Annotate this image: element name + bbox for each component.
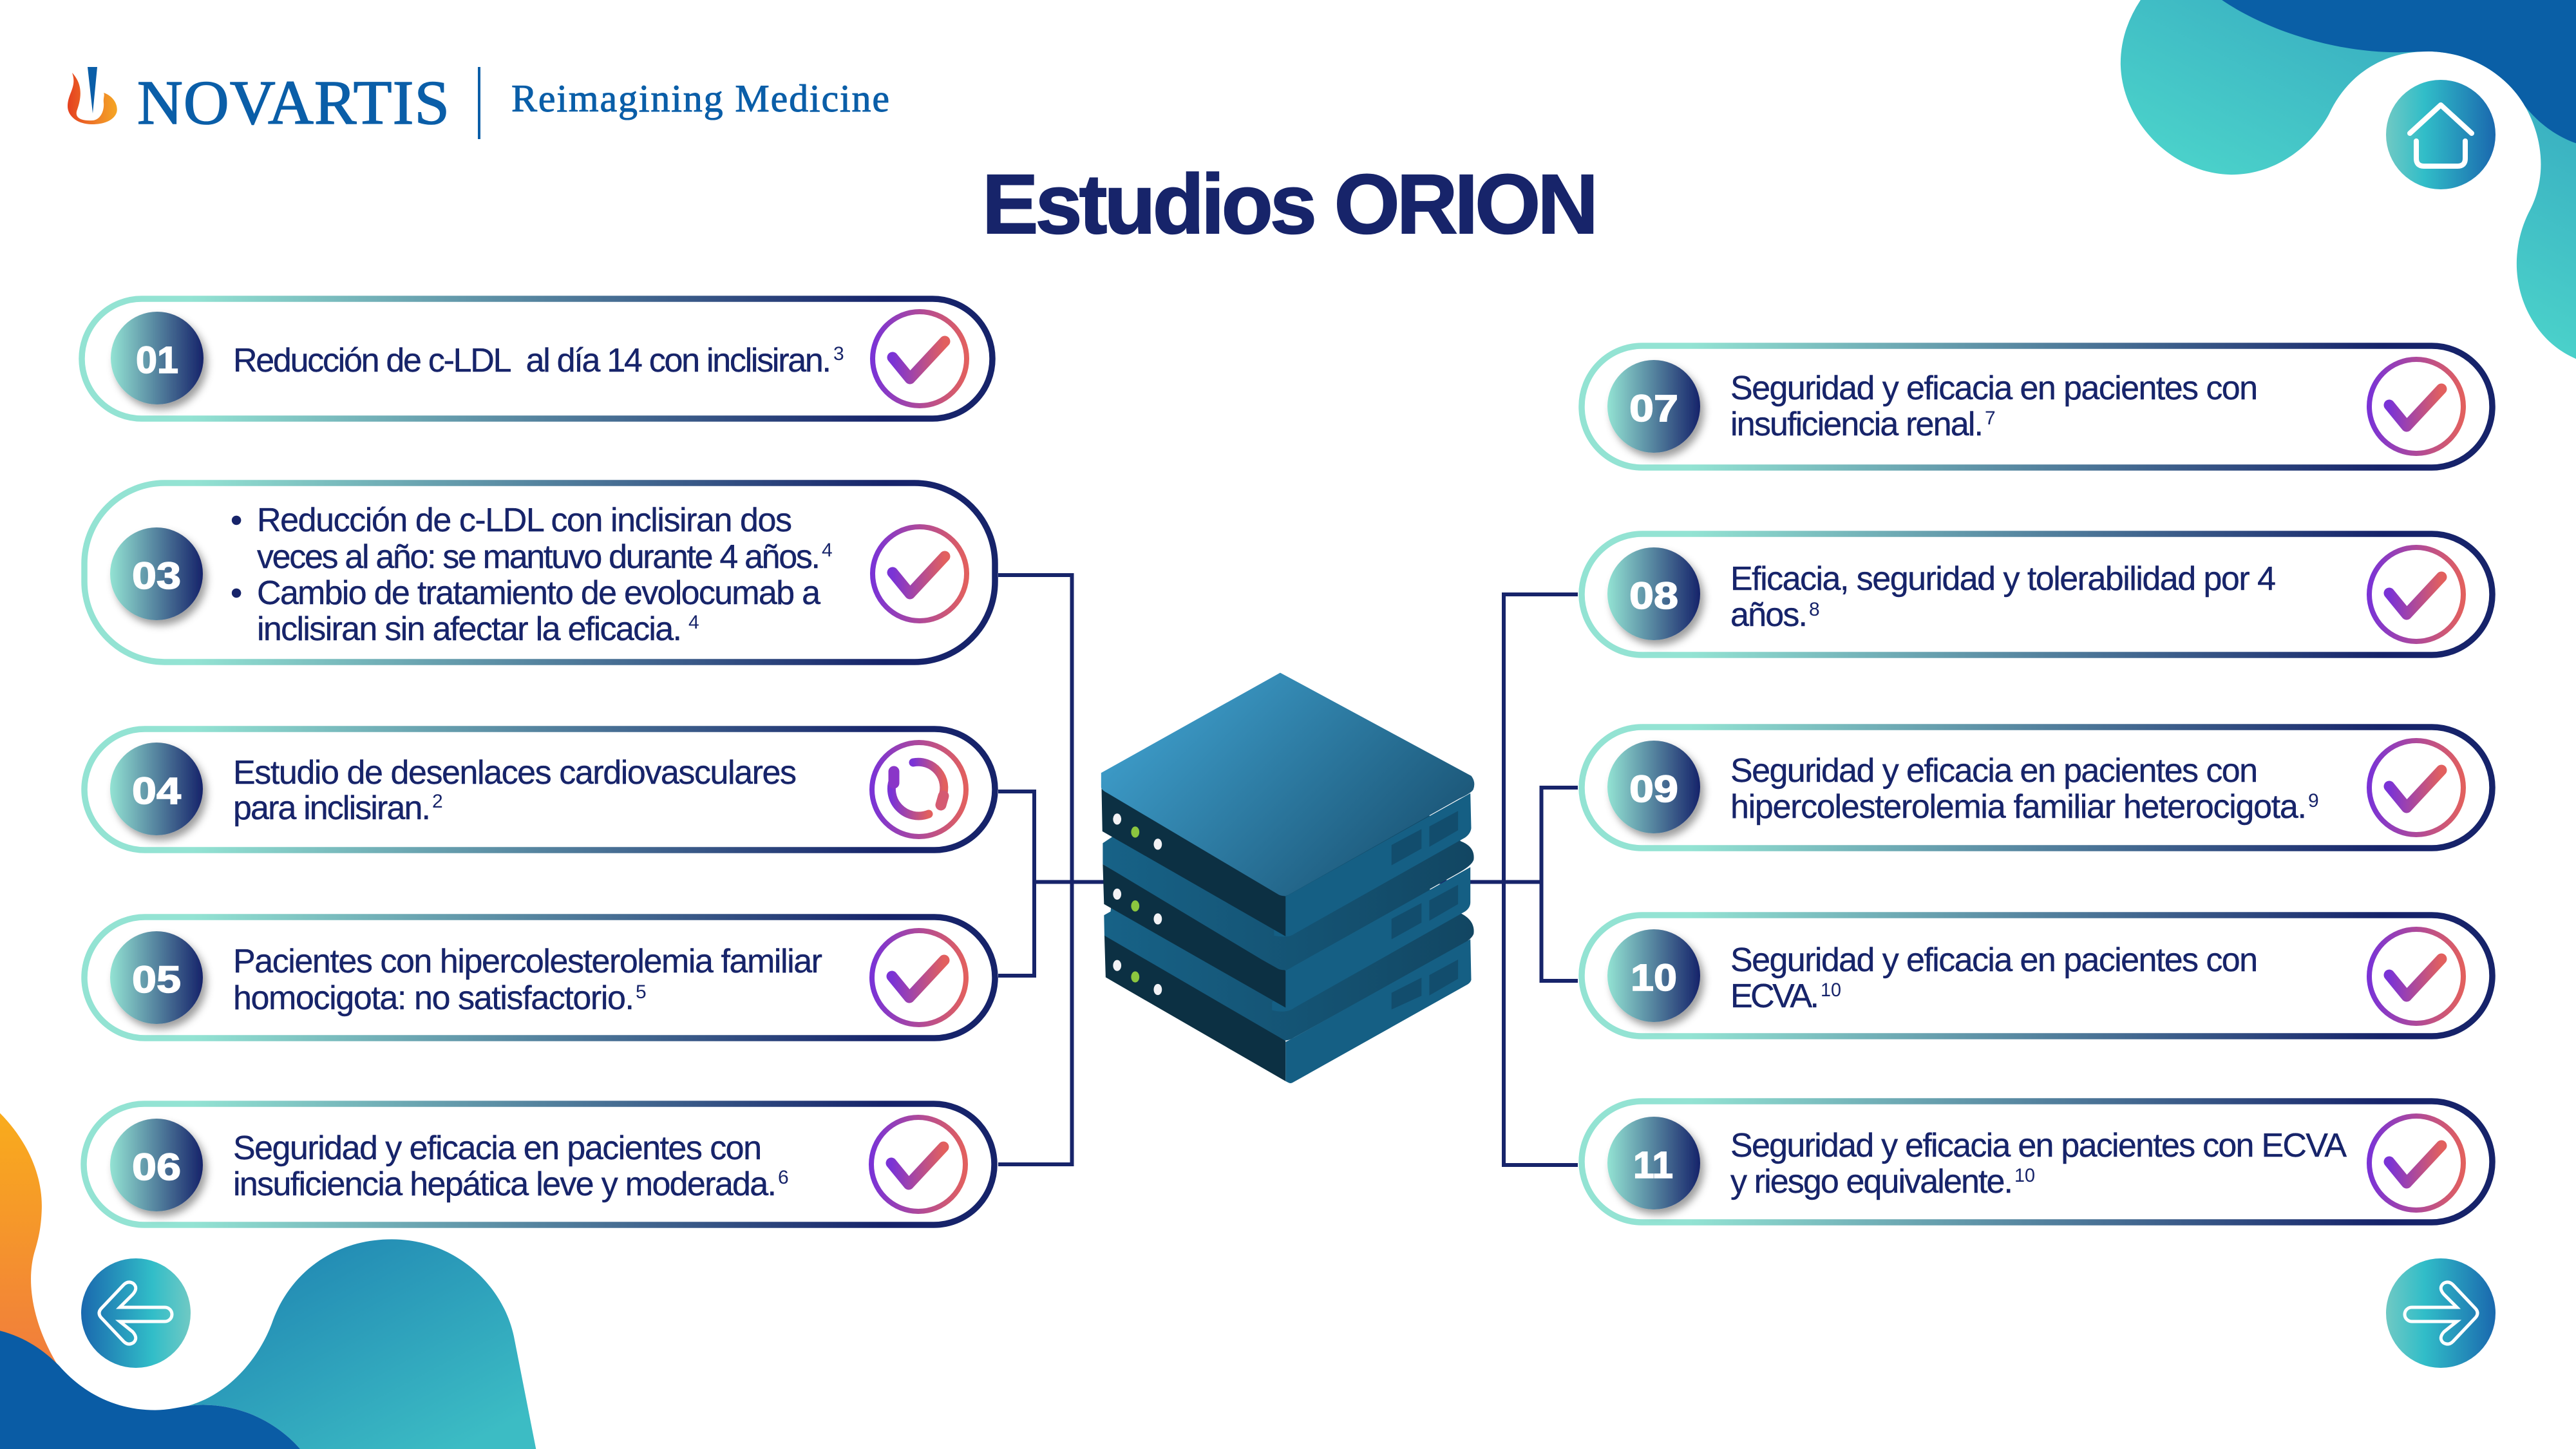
Novartis logo: NOVARTIS <box>137 68 450 138</box>
panel: study 09: 09 <box>1629 768 1678 810</box>
panel: study 03: • <box>231 574 242 612</box>
panel: study 05: 5 <box>636 981 647 1003</box>
panel: study 06: Seguridad y eficacia en pacientes con <box>233 1130 762 1167</box>
panel: study 10: Seguridad y eficacia en pacientes con <box>1730 942 2258 979</box>
panel: study 03: Cambio de tratamiento de evolocumab a <box>257 574 820 612</box>
server: top unit <box>1101 673 1474 936</box>
panel: study 04: 04 <box>132 770 181 812</box>
panel: study 08: 8 <box>1809 599 1820 620</box>
panel: study 10 <box>1582 915 2492 1036</box>
panel: study 03: • <box>231 502 242 539</box>
panel: study 11 <box>1582 1101 2492 1222</box>
panel: study 01 <box>82 299 992 419</box>
panel: study 03: 4 <box>688 612 699 633</box>
panel: study 11: y riesgo equivalente. <box>1730 1163 2013 1200</box>
panel: study 06: 06 <box>132 1146 181 1188</box>
panel: study 05: homocigota: no satisfactorio. <box>233 980 634 1017</box>
server: middle unit <box>1103 806 1474 1012</box>
panel: study 04: Estudio de desenlaces cardiovasculares <box>233 754 797 791</box>
panel: study 07: 7 <box>1985 408 1996 429</box>
panel: study 04: para inclisiran. <box>233 790 431 827</box>
panel: study 09: 9 <box>2308 790 2319 811</box>
panel: study 01: 01 <box>136 339 178 381</box>
panel: study 01: 3 <box>833 343 844 365</box>
panel: study 11: Seguridad y eficacia en pacientes con ECVA <box>1730 1127 2347 1164</box>
server stack illustration <box>1101 673 1474 1083</box>
panel: study 08: años. <box>1730 596 1808 634</box>
panel: study 10: ECVA. <box>1730 978 1819 1015</box>
panel: study 06 <box>84 1104 994 1225</box>
panel: study 07: 07 <box>1629 388 1678 430</box>
panel: study 03: 03 <box>132 555 181 597</box>
panel: study 11: 10 <box>2014 1165 2035 1186</box>
icon: next arrow button <box>2386 1258 2496 1368</box>
decorative blobs: bottom left <box>0 1113 536 1449</box>
Novartis logo <box>68 67 889 139</box>
icon: back arrow button <box>81 1258 191 1368</box>
title: Estudios ORION <box>982 156 1598 251</box>
decorative blobs: top right <box>2121 0 2576 359</box>
panel: study 07: insuficiencia renal. <box>1730 406 1984 443</box>
panel: study 10: 10 <box>1631 957 1677 999</box>
Novartis logo: Reimagining Medicine <box>511 77 889 120</box>
panel: study 04: 2 <box>432 791 443 812</box>
panel: study 08 <box>1582 534 2492 655</box>
panel: study 11: 11 <box>1633 1144 1673 1186</box>
panel: study 05: Pacientes con hipercolesterolemia familiar <box>233 943 822 980</box>
panel: study 05: 05 <box>132 959 181 1001</box>
icon: home button <box>2386 80 2496 189</box>
panel: study 06: 6 <box>778 1167 789 1188</box>
panel: study 03: inclisiran sin afectar la eficacia. <box>257 611 682 648</box>
panel: study 03: veces al año: se mantuvo durante 4 años. <box>257 538 820 576</box>
panel: study 09 <box>1582 727 2492 848</box>
icon: in-progress cycle <box>872 743 966 837</box>
panel: study 06: insuficiencia hepática leve y moderada. <box>233 1166 777 1203</box>
connector lines <box>998 575 1578 1165</box>
panel: study 03: Reducción de c-LDL con inclisiran dos <box>257 502 792 539</box>
panel: study 09: hipercolesterolemia familiar heterocigota. <box>1730 788 2307 826</box>
panel: study 09: Seguridad y eficacia en pacientes con <box>1730 752 2258 790</box>
panel: study 05 <box>84 917 995 1038</box>
server: bottom unit <box>1104 880 1474 1083</box>
panel: study 08: 08 <box>1629 575 1678 617</box>
panel: study 03: 4 <box>822 540 833 561</box>
panel: study 01: Reducción de c-LDL al día 14 con inclisiran. <box>233 342 831 379</box>
panel: study 04 <box>84 729 995 850</box>
panel: study 10: 10 <box>1821 980 1841 1001</box>
panel: study 07 <box>1582 346 2492 468</box>
panel: study 03 <box>84 483 995 662</box>
panel: study 08: Eficacia, seguridad y tolerabilidad por 4 <box>1730 560 2276 598</box>
panel: study 07: Seguridad y eficacia en pacientes con <box>1730 370 2258 407</box>
